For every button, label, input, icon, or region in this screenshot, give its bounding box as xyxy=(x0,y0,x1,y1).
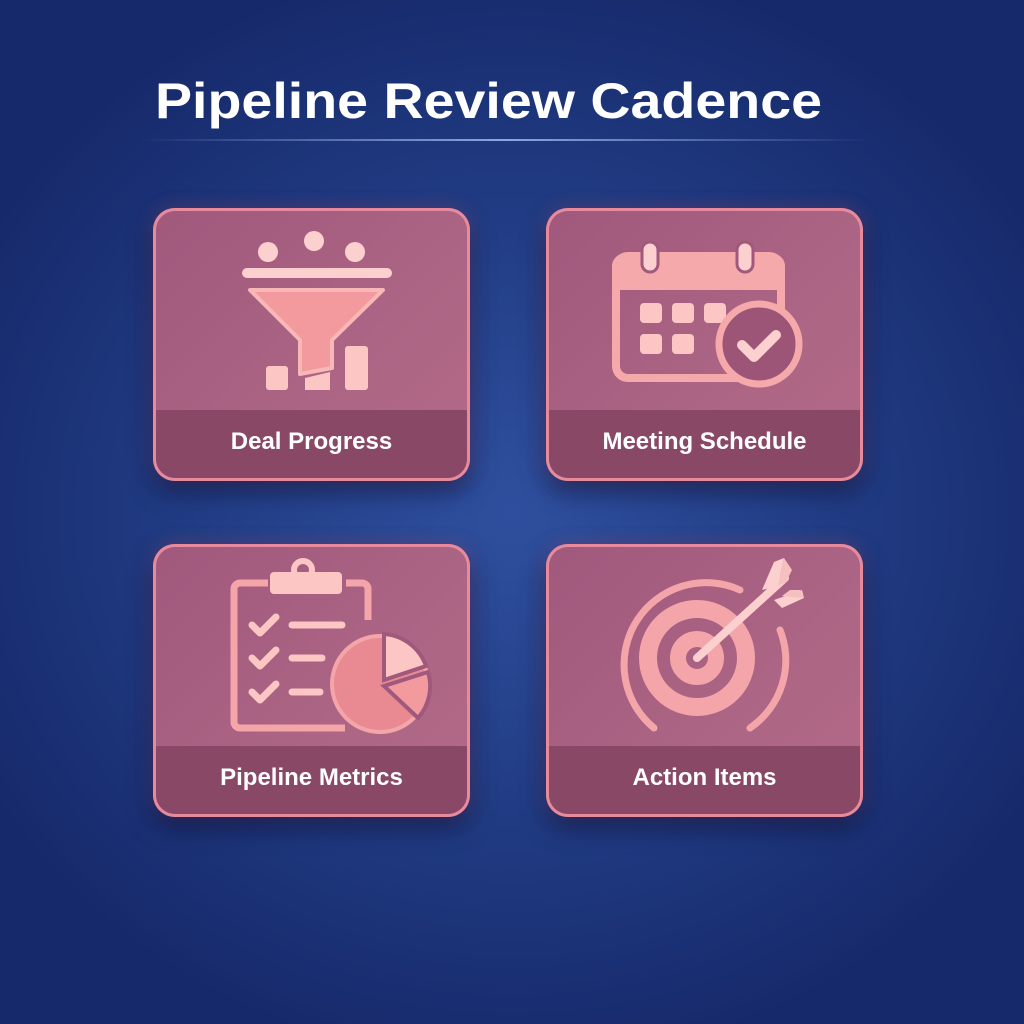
icon: calendar xyxy=(612,240,802,388)
label xyxy=(156,410,467,478)
label: Deal Progress xyxy=(231,428,392,455)
panel: meeting schedule xyxy=(546,208,863,481)
label xyxy=(549,410,860,478)
label: Action Items xyxy=(632,764,777,791)
label: Meeting Schedule xyxy=(602,428,807,455)
label xyxy=(549,746,860,814)
panel: pipeline metrics xyxy=(153,544,470,817)
label xyxy=(156,746,467,814)
icon: clipboard with pie xyxy=(230,558,432,734)
panel: action items xyxy=(546,544,863,817)
label: Pipeline Metrics xyxy=(220,764,403,791)
icon: funnel xyxy=(242,231,392,390)
panel: deal progress xyxy=(153,208,470,481)
title: Pipeline Review Cadence xyxy=(155,73,822,129)
icon: target xyxy=(620,558,804,732)
